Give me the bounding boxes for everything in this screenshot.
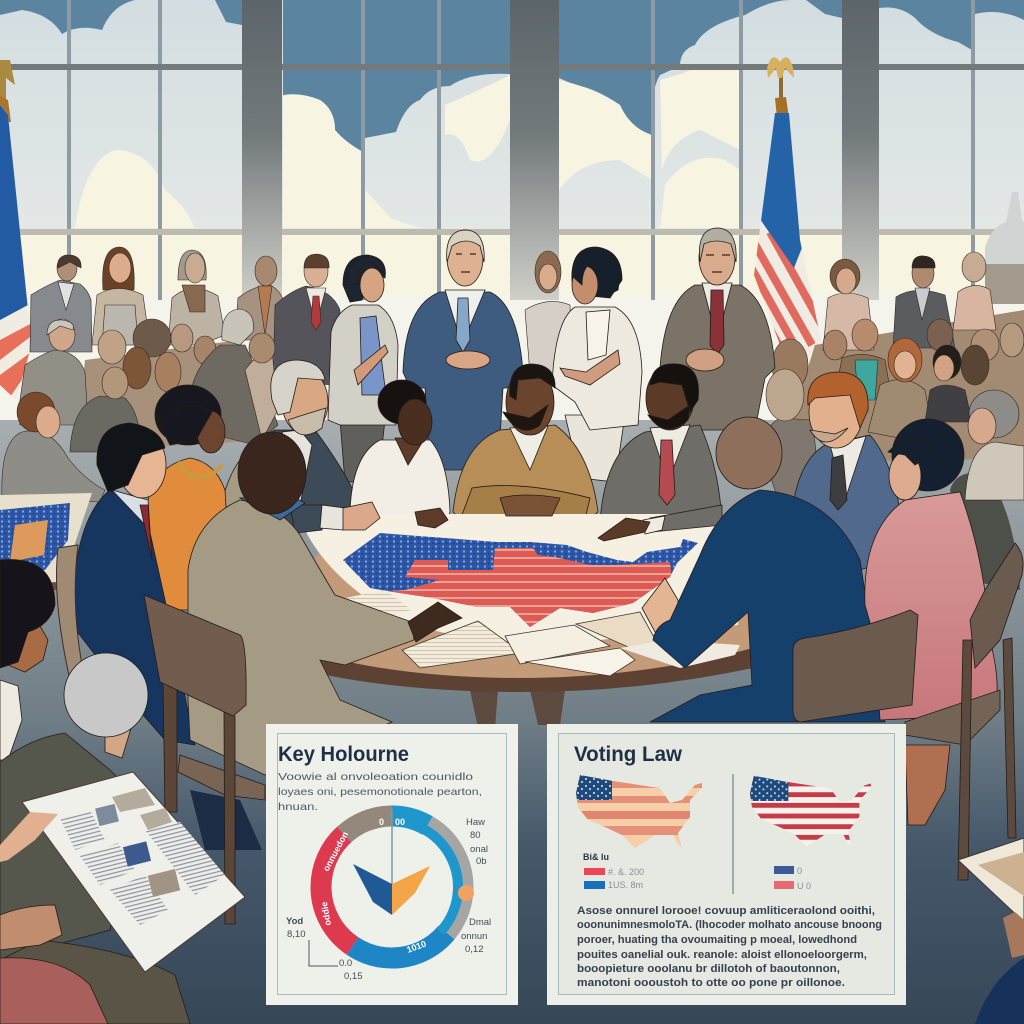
text block body: poroer, huating tha ovoumaiting p moeal, lowedhond [577,934,857,946]
foreground right corner person [975,912,1024,1024]
paper lower [525,648,635,676]
chair at left [56,545,85,680]
holding hand [0,812,58,862]
white map sheet [305,514,745,642]
US map on table [340,530,700,632]
standing pale woman [525,251,572,375]
far right chair [905,543,1023,880]
chart labels: onnun [461,931,487,942]
man dark suit red tie [273,254,340,385]
navy trousers and shoe [190,790,262,850]
ring labels: 1010 [405,939,428,955]
chart labels: Yod [286,916,303,927]
standing woman with black bob [328,255,398,482]
chart labels: Haw [466,817,485,828]
text block body [577,905,882,989]
foreground figure with white hair [0,653,190,1024]
text block body: pouites oanelial ouk. reanole: aloist ellonoeloorgerm, [577,949,867,961]
text block intro: hnuan. [278,801,318,813]
elder in pink stripes [953,252,996,330]
seated woman in white top [350,380,450,528]
standing woman white jacket [552,247,642,482]
text block body: manotoni oooustoh to otte oo pone pr oillonoe. [577,977,845,989]
chart labels: 0,15 [344,971,362,982]
right back crowd [762,252,1024,505]
left flag with pole [0,60,30,400]
paper stack left [335,590,412,625]
front left chair [144,595,265,924]
chart labels: 0b [476,856,487,867]
legend left: Bi& lu [583,852,609,862]
foreground right paper [958,838,1024,922]
standing center man navy suit [403,230,523,470]
text block intro: Voowie al onvoleoation counidlo [278,771,473,783]
back row standing crowd [30,247,340,385]
standing right man grey suit [660,228,775,430]
window frames [0,0,1024,300]
map left [576,775,702,848]
chart labels [286,817,491,982]
paper front [402,621,522,668]
map right [750,776,871,846]
seated woman with afro, orange top [145,385,232,610]
seated old man with white hair [220,360,360,540]
seated man navy suit at left [72,423,195,745]
chart labels: Dmal [469,917,491,928]
paper far right [620,640,740,668]
text block body: Asose onnurel lorooe! covuup amliticeraolond ooithi, [577,905,875,917]
ring labels: 00 [395,817,405,827]
foreground woman with afro [0,560,55,760]
seated man in tan sweater [453,364,598,518]
side table with map at left [0,493,92,592]
man grey suit white hair [190,309,278,445]
chart labels: 80 [470,830,481,841]
table legs [470,690,565,728]
capitol dome [985,192,1024,304]
panel: Key Holourne [266,724,518,1005]
paper middle [505,625,610,664]
woman beige [245,333,278,440]
chart labels: 8,10 [287,929,306,940]
panel: Voting Law [547,724,906,1005]
man teal shirt [835,319,892,400]
legend right [774,866,811,891]
man dark suit right [893,256,955,348]
woman taupe [168,250,225,345]
text block intro [278,771,482,813]
woman in grey hoodie [2,392,105,502]
gray haired woman right [965,390,1024,500]
man dark suit [925,345,972,422]
chart labels: 0,12 [465,944,484,955]
older woman grey [762,369,817,505]
man far left [30,255,92,352]
legend right: U 0 [797,881,811,891]
blue sky patches [0,0,1024,152]
left mid crowd [2,309,278,502]
seated man grey jacket red tie [600,364,722,540]
hands and sleeves on table [290,495,722,541]
chevron pointer [353,864,430,915]
legend left: 1US. 8m [608,880,643,890]
table wood top [295,525,755,682]
seated bald man in tan jacket [188,432,462,775]
ring labels: 0 [379,817,384,827]
ring labels: onnuedon [321,830,350,873]
right flag with pole and eagle [754,57,818,347]
seated bald man navy suit back view [642,417,885,722]
man faded suit [235,256,283,340]
ring labels: oddie [319,901,333,926]
foreground handout paper [0,772,245,972]
man olive jacket [70,367,140,452]
right seated chair [793,610,918,722]
main round table [290,495,755,728]
ring labels [319,817,428,955]
woman tan cardigan [92,247,150,345]
bright cloud highlights [0,65,1024,295]
heading: Voting Law: Voting Law [574,743,683,766]
chart labels: onal [470,844,488,855]
white haired man behind left [20,319,88,425]
seated red haired man [793,372,905,580]
heading: Key Holourne: Key Holourne [278,743,409,766]
text block body: booopieture ooolanu br dillotoh of baoutonnon, [577,963,840,975]
divider [732,774,734,894]
paper right [576,612,660,650]
legend left [583,852,644,890]
text block intro: loyaes oni, pesemonotionale pearton, [278,786,482,798]
woman orange hair [868,338,935,445]
legend left: #. &. 200 [608,867,644,877]
table rim [295,648,753,692]
seated woman in pink [865,419,997,825]
chart labels: 0.0 [339,958,352,969]
donut chart [316,809,474,963]
dark olive back figure [950,472,1020,590]
legend right: 0 [797,866,802,876]
text block body: ooonunimnesmoloTA. (lhocoder molhato ancouse bnoong [577,919,882,931]
woman at right [823,259,874,350]
